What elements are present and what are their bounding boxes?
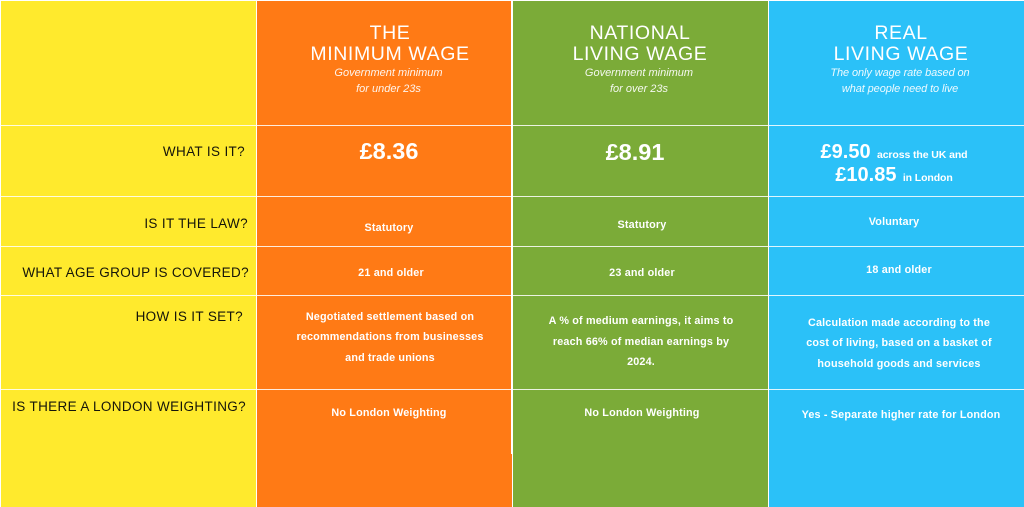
heading: national living wage: LIVING WAGE	[573, 42, 707, 64]
heading: the minimum wage	[310, 22, 470, 64]
cell: how national living wage is set	[548, 315, 733, 368]
cell: how minimum wage is set: Negotiated settlement based on	[306, 310, 474, 322]
heading: real living wage	[834, 22, 968, 64]
cell: national living wage london weighting: No London Weighting	[584, 407, 700, 419]
cell: how minimum wage is set	[296, 310, 484, 364]
panel: minimum wage column	[257, 1, 511, 507]
rate: national living wage: £8.91	[606, 139, 664, 165]
panel: question column	[1, 1, 256, 507]
subheading: real living wage: The only wage rate based on	[830, 67, 970, 79]
heading: real living wage: REAL	[874, 22, 928, 44]
subheading: real living wage	[830, 67, 970, 94]
cell: how real living wage is set: household goods and services	[817, 358, 981, 370]
cell: how national living wage is set: reach 66% of median earnings by	[553, 336, 729, 348]
cell: national living wage law: Statutory	[618, 219, 666, 231]
cell: how minimum wage is set: and trade unions	[345, 352, 435, 364]
heading: national living wage	[573, 22, 707, 64]
label: is it the law: IS IT THE LAW?	[144, 216, 248, 231]
cell: real living wage age: 18 and older	[866, 264, 932, 276]
rate: real living wage: £9.50 across the UK and	[821, 140, 967, 162]
subheading: real living wage: what people need to live	[842, 82, 958, 94]
cell: how real living wage is set	[806, 316, 992, 370]
subheading: minimum wage: Government minimum	[334, 67, 443, 79]
cell: real living wage law: Voluntary	[869, 216, 919, 228]
green column lower extension	[767, 454, 768, 507]
rate: minimum wage: £8.36	[360, 138, 418, 164]
cell: how national living wage is set: 2024.	[627, 356, 655, 368]
heading: national living wage: NATIONAL	[590, 22, 690, 44]
cell: minimum wage age: 21 and older	[358, 267, 424, 279]
subheading: minimum wage	[334, 67, 443, 94]
subheading: national living wage: for over 23s	[610, 82, 668, 94]
heading: the minimum wage: THE	[370, 22, 410, 44]
cell: minimum wage law: Statutory	[365, 222, 413, 234]
cell: how real living wage is set: Calculation made according to the	[808, 316, 990, 328]
rate: real living wage: £10.85 in London	[835, 164, 953, 186]
label: what age group: WHAT AGE GROUP IS COVERED?	[22, 265, 249, 280]
heading: the minimum wage: MINIMUM WAGE	[310, 42, 470, 64]
heading: real living wage: LIVING WAGE	[834, 42, 968, 64]
cell: national living wage age: 23 and older	[609, 267, 675, 279]
cell: how minimum wage is set: recommendations from businesses	[296, 331, 484, 343]
subheading: national living wage: Government minimum	[585, 67, 693, 79]
label: london weighting: IS THERE A LONDON WEIGHTING?	[12, 399, 246, 414]
orange column lower extension	[511, 454, 512, 507]
cell: how national living wage is set: A % of medium earnings, it aims to	[549, 315, 733, 327]
cell: how real living wage is set: cost of living, based on a basket of	[806, 337, 992, 349]
cell: real living wage london weighting: Yes - Separate higher rate for London	[802, 409, 1000, 421]
subheading: national living wage	[585, 67, 693, 94]
label: how is it set: HOW IS IT SET?	[136, 309, 243, 324]
label: what is it: WHAT IS IT?	[163, 144, 245, 159]
subheading: minimum wage: for under 23s	[356, 82, 421, 94]
rate: real living wage	[820, 140, 967, 186]
panel: national living wage column	[513, 1, 768, 507]
panel: real living wage column	[769, 1, 1024, 507]
cell: minimum wage london weighting: No London Weighting	[331, 407, 447, 419]
